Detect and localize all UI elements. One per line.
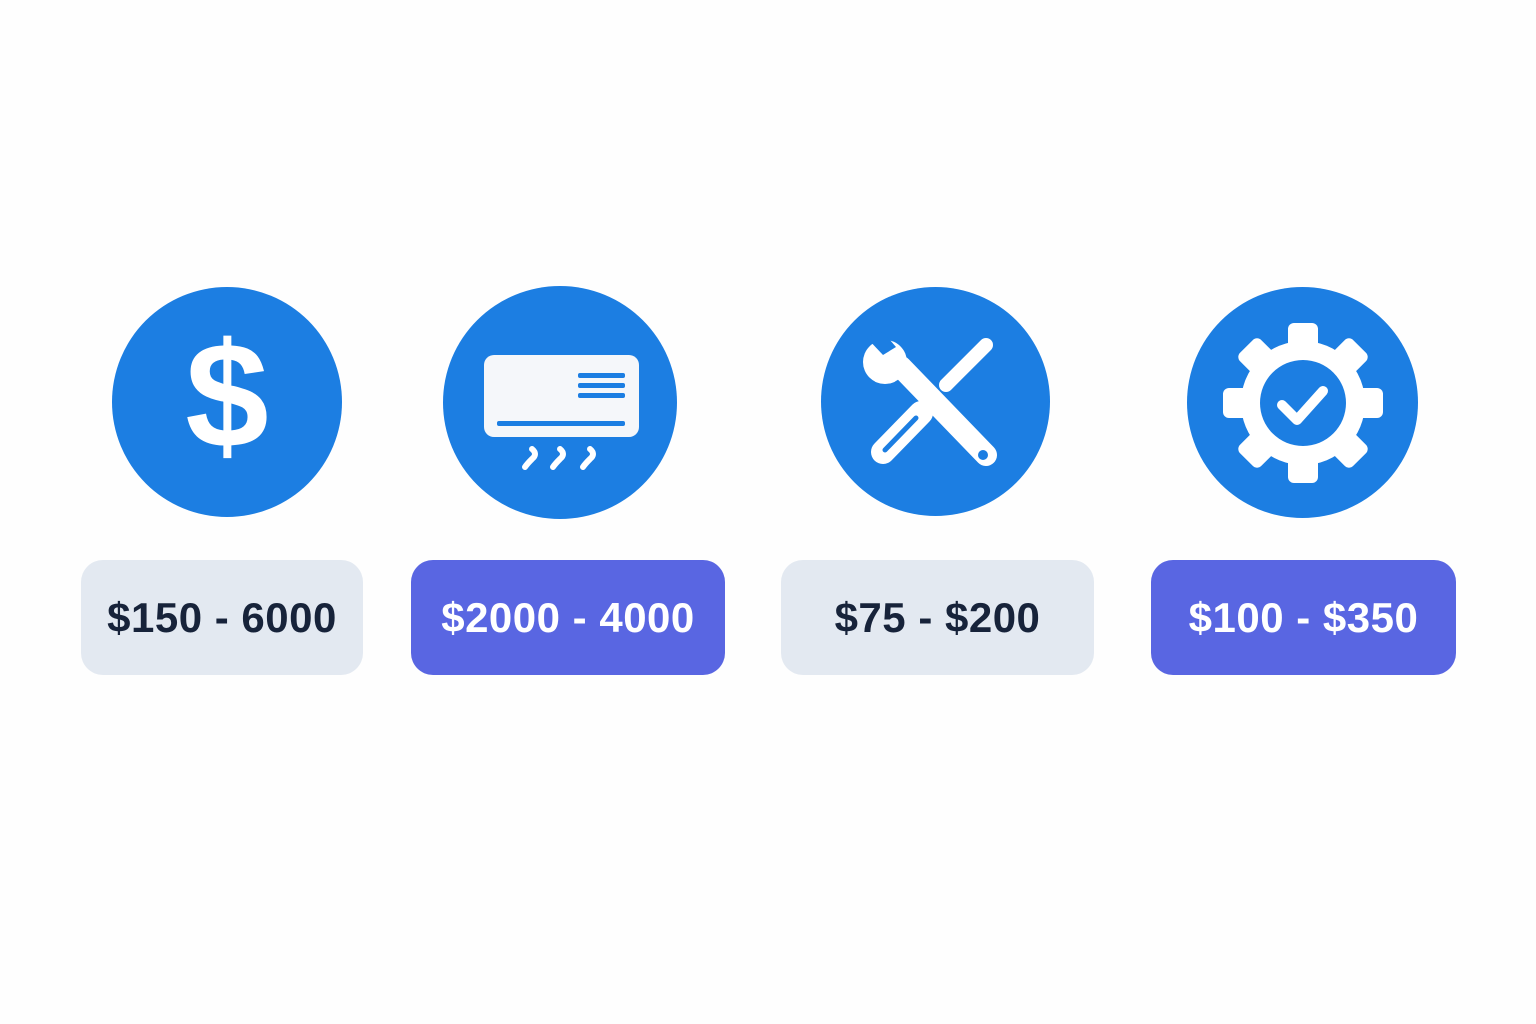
icon: dollar circle <box>112 287 342 517</box>
icon: air conditioner circle <box>443 286 677 519</box>
price pill 2 <box>411 560 725 675</box>
price pill 4 <box>1151 560 1456 675</box>
icon: gear check circle <box>1187 287 1418 518</box>
price pill 1 <box>81 560 363 675</box>
price pill 1: $150 - 6000 <box>107 594 337 640</box>
icon: tools circle <box>821 287 1050 516</box>
price pill 4: $100 - $350 <box>1189 594 1418 640</box>
price pill 3: $75 - $200 <box>835 594 1040 640</box>
price pill 2: $2000 - 4000 <box>441 594 695 640</box>
dollar sign: $ <box>185 311 269 479</box>
price pill 3 <box>781 560 1094 675</box>
